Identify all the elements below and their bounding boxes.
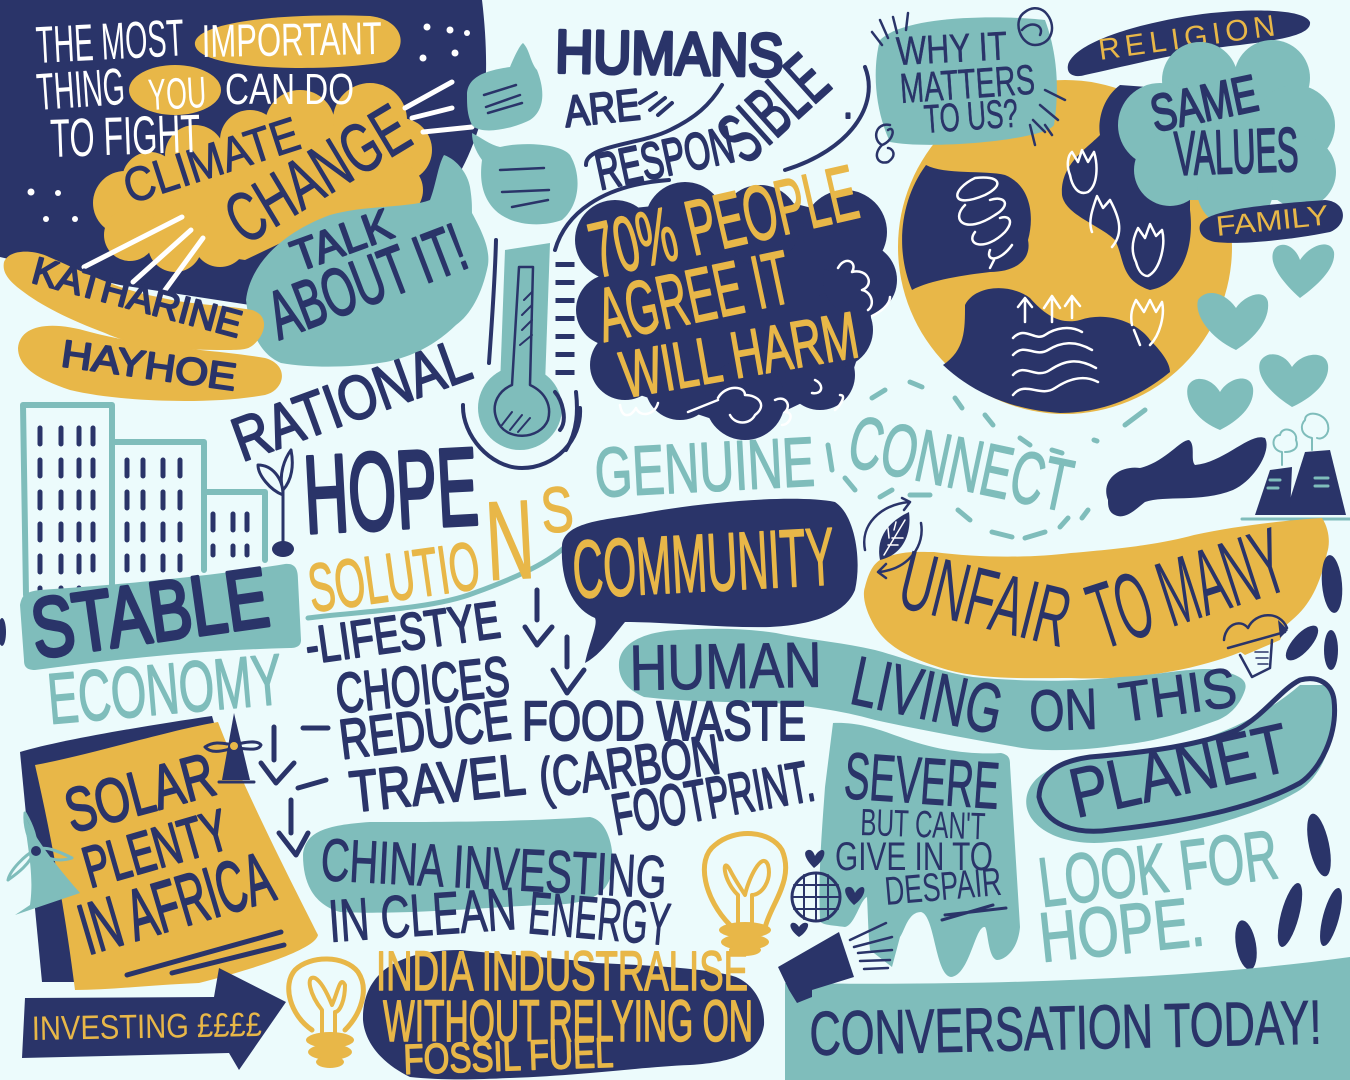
icon: lightbulb large <box>704 834 786 956</box>
heading: humans are responsible: RESPON <box>590 116 739 202</box>
panel: rational hope <box>223 325 481 557</box>
panel: solar plenty in africa: IN AFRICA <box>70 837 282 970</box>
panel: 70 percent cloud: WILL HARM <box>615 297 864 412</box>
text: look for hope <box>1034 815 1282 977</box>
pill: family: FAMILY <box>1214 199 1330 242</box>
panel: 70 percent cloud <box>575 148 897 440</box>
text: climate: CLIMATE <box>117 108 306 214</box>
heading: humans are responsible: . <box>843 79 853 128</box>
list: lifestyle solutions <box>298 591 819 848</box>
icon: navy cloud <box>1106 437 1267 516</box>
panel: 70 percent cloud: AGREE IT <box>590 235 798 359</box>
heading: the most important thing: IMPORTANT <box>201 12 382 67</box>
heading: the most important thing: THE MOST <box>35 9 185 75</box>
text: genuine connect <box>593 382 1145 538</box>
panel: severe drip: SEVERE <box>842 738 1002 823</box>
text: genuine connect: CONNECT <box>842 399 1080 528</box>
pill: planet: PLANET <box>1062 708 1296 833</box>
panel: rational hope: HOPE <box>301 425 481 557</box>
panel: top-left navy background <box>0 0 486 305</box>
panel: solar plenty in africa <box>20 713 318 990</box>
panel: solutions <box>304 472 576 627</box>
panel: rational hope: RATIONAL <box>223 325 480 475</box>
pill: religion: RELIGION <box>1096 9 1277 67</box>
heading: humans are responsible: HUMANS <box>555 18 784 89</box>
icon: falling leaves <box>0 554 1346 971</box>
heading: the most important thing: YOU <box>147 68 207 120</box>
panel: stable economy: ECONOMY <box>44 640 286 740</box>
rays <box>84 82 472 297</box>
panel: severe drip: DESPAIR <box>883 860 1003 914</box>
panel: severe drip: BUT CAN'T <box>860 802 986 848</box>
panel: india industralise: WITHOUT RELYING ON <box>383 989 753 1054</box>
list: lifestyle solutions: TRAVEL <box>347 742 528 825</box>
list: lifestyle solutions: FOOTPRINT. <box>607 748 819 848</box>
globe <box>898 80 1232 414</box>
heading: the most important thing: THING <box>35 58 127 122</box>
speech bubble: community: COMMUNITY <box>570 511 837 616</box>
arrow: investing <box>22 968 286 1070</box>
list: lifestyle solutions: CHOICES <box>333 644 512 725</box>
thermometer <box>463 180 669 468</box>
scribble <box>957 177 1012 268</box>
panel: china investing: IN CLEAN <box>326 875 518 955</box>
heading: the most important thing <box>35 9 382 169</box>
band: human living on this: ON <box>1028 677 1098 744</box>
icons: hearts <box>1187 244 1334 430</box>
speech bubble: talk about it: TALK <box>285 200 399 281</box>
icon: leaf recycle <box>864 498 922 578</box>
panel: solutions: S <box>538 472 576 547</box>
pill: family <box>1200 199 1343 243</box>
flames <box>1068 150 1163 345</box>
cloud: same values: SAME <box>1145 65 1263 144</box>
pill: religion <box>1068 9 1310 76</box>
pill: unfair to many: UNFAIR <box>891 532 1080 665</box>
pill: unfair to many <box>864 507 1329 678</box>
heading: humans are responsible: ARE <box>562 80 643 137</box>
icon: megaphone <box>778 923 892 1003</box>
icon: plant pot <box>1224 615 1288 677</box>
icon: teal wind turbine <box>8 813 80 915</box>
heading: the most important thing: TO FIGHT <box>49 104 201 169</box>
arrow: investing: INVESTING ££££ <box>31 1006 262 1048</box>
panel: climate change cloud <box>84 82 472 297</box>
heading: humans are responsible <box>555 18 869 202</box>
text: look for hope: HOPE. <box>1035 882 1208 977</box>
icons: small speech bubbles <box>467 43 578 224</box>
list: lifestyle solutions: FOOD WASTE <box>522 689 806 752</box>
highlight: you <box>129 65 221 115</box>
panel: india industralise <box>363 939 764 1080</box>
highlight: important <box>195 15 401 68</box>
band: human living on this <box>619 629 1246 750</box>
icon: wind turbine <box>205 713 261 782</box>
panel: solutions: SOLUTIO <box>304 528 484 627</box>
panel: india industralise: INDIA INDUSTRALISE <box>376 939 748 1002</box>
waves and arrows <box>1013 296 1098 395</box>
arrows: downward <box>261 590 584 855</box>
name: katharine hayhoe: KATHARINE <box>28 250 246 346</box>
icon: globe with hearts <box>790 850 864 937</box>
cloud: same values <box>1118 40 1336 228</box>
speech bubble: talk about it: ABOUT IT! <box>257 209 477 354</box>
panel: why it matters <box>872 8 1065 163</box>
panel: why it matters: MATTERS <box>898 56 1036 112</box>
panel: why it matters: WHY IT <box>895 24 1008 74</box>
panel: severe drip <box>819 723 1020 977</box>
text: genuine connect: GENUINE <box>593 423 816 512</box>
panel: stable economy: STABLE <box>25 550 274 676</box>
banner: conversation today <box>785 957 1350 1080</box>
icon: lightbulb small <box>289 959 363 1068</box>
icon: factories <box>1242 414 1350 519</box>
panel: china investing: CHINA INVESTING <box>319 826 668 911</box>
list: lifestyle solutions: (CARBON <box>535 722 724 810</box>
panel: solutions: N <box>483 477 537 604</box>
band: human living on this: THIS <box>1115 655 1241 734</box>
speech bubble: talk about it <box>246 155 488 367</box>
panel: why it matters: TO US? <box>923 92 1019 142</box>
band: human living on this: HUMAN <box>629 629 822 704</box>
panel: china investing: ENERGY <box>526 879 673 958</box>
heading: the most important thing: CAN DO <box>225 65 354 114</box>
band: human living on this: LIVING <box>845 641 1010 749</box>
panel: china investing <box>303 817 673 958</box>
icon: seedling <box>258 450 294 557</box>
panel: solar plenty in africa: PLENTY <box>76 797 236 900</box>
name: katharine hayhoe: HAYHOE <box>59 333 239 399</box>
panel: solar plenty in africa: SOLAR <box>58 741 222 847</box>
panel: severe drip: GIVE IN TO <box>835 835 993 879</box>
name: katharine hayhoe <box>4 250 282 401</box>
panel: stable economy <box>20 550 301 740</box>
panel: 70 percent cloud: 70% PEOPLE <box>581 148 866 295</box>
list: lifestyle solutions: REDUCE <box>336 687 514 771</box>
panel: buildings <box>23 405 265 595</box>
list: lifestyle solutions: -LIFESTYE <box>302 591 504 676</box>
speech bubble: community <box>562 499 858 663</box>
text: change: CHANGE <box>212 89 423 259</box>
